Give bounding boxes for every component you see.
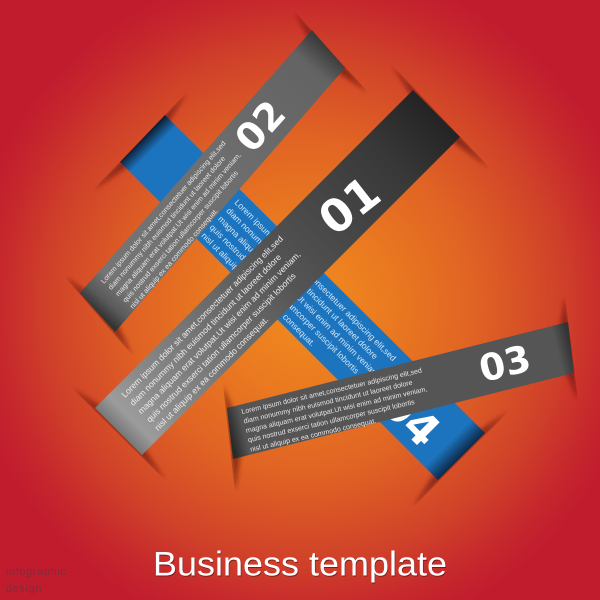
ribbon 04: blue <box>120 115 485 480</box>
title: Business template <box>154 547 448 585</box>
watermark caption: infographic <box>6 566 66 578</box>
number 02: 02 <box>226 92 294 161</box>
ribbon 03 text: diam nonummy nibh euismod tincidunt ut laoreet dolore <box>243 380 413 425</box>
ribbon 04 text: diam nonummy nibh euismod tincidunt ut laoreet dolore <box>224 206 380 361</box>
number 04: 04 <box>371 378 450 457</box>
ribbon 03 text: nisl ut aliquip ex ea commodo consequat. <box>250 418 377 454</box>
ribbon 02 text: Lorem ipsum dolor sit amet,consectetuer adipiscing elit,sed <box>99 140 228 285</box>
watermark caption: design <box>6 583 42 595</box>
ribbon 02 text: magna aliquam erat volutpat.Ut wisi enim ad minim veniam, <box>114 151 243 298</box>
ribbon 04 text: quis nostrud exserci tation ullamcorper suscipit lobortis <box>208 222 361 376</box>
slit shadows <box>65 12 578 507</box>
ribbon 01 text: nisl ut aliquip ex ea commodo consequat. <box>152 315 270 433</box>
ribbon 01 text: quis nostrud exserci tation ullamcorper suscipit lobortis <box>144 271 298 424</box>
ribbon 01 text: magna aliquam erat volutpat.Ut wisi enim ad minim veniam, <box>136 249 303 416</box>
ribbon 02 text: quis nostrud exserci tation ullamcorper suscipit lobortis <box>121 169 240 304</box>
ribbon 02 <box>80 30 345 332</box>
ribbon 04 text: magna aliquam erat volutpat.Ut wisi enim ad minim veniam, <box>216 214 383 381</box>
number 01: 01 <box>308 166 390 246</box>
ribbon 04 text: Lorem ipsum dolor sit amet,consectetuer adipiscing elit,sed <box>233 197 398 363</box>
ribbon 01 text: diam nonummy nibh euismod tincidunt ut laoreet dolore <box>128 252 283 408</box>
ribbon 03 text: quis nostrud exserci tation ullamcorper suscipit lobortis <box>247 399 416 444</box>
ribbon 01 text: Lorem ipsum dolor sit amet,consectetuer adipiscing elit,sed <box>119 234 285 399</box>
ribbon 02 text: nisl ut aliquip ex ea commodo consequat. <box>128 207 220 311</box>
ribbon 04 text: nisl ut aliquip ex ea commodo consequat. <box>199 230 317 348</box>
ribbon 03 text: Lorem ipsum dolor sit amet,consectetuer adipiscing elit,sed <box>241 368 423 416</box>
ribbon 03 <box>227 322 574 459</box>
title: Business template <box>153 546 447 584</box>
ribbon 02 text: diam nonummy nibh euismod tincidunt ut laoreet dolore <box>107 155 227 292</box>
ribbon 01 <box>95 90 460 455</box>
ribbon 03 text: magna aliquam erat volutpat.Ut wisi enim ad minim veniam, <box>245 386 428 435</box>
number 03: 03 <box>475 337 535 391</box>
